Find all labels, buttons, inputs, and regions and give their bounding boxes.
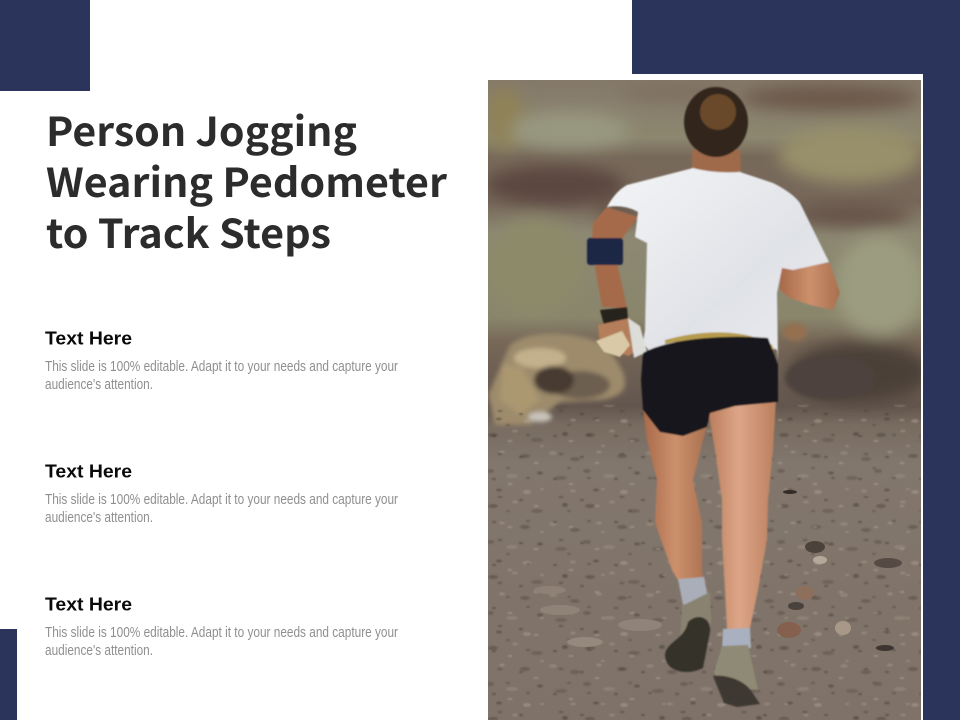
runner: hand with glove (596, 318, 647, 358)
runner (587, 87, 840, 707)
runner: waistband (665, 332, 774, 350)
text block 2: Text Here (45, 460, 132, 482)
text block 2 (45, 460, 398, 526)
text block 3 (45, 594, 398, 659)
title: Person Jogging (46, 100, 357, 158)
runner: white shirt (607, 168, 829, 360)
runner: left arm (592, 207, 638, 308)
runner: left sock (678, 577, 708, 605)
text block 3: audience's attention. (45, 642, 153, 659)
runner: left shoe (665, 592, 711, 672)
runner: right sock (722, 628, 751, 650)
title: Wearing Pedometer (46, 151, 448, 209)
runner: head and hair (684, 87, 748, 173)
text block 1 (45, 328, 398, 393)
text block 1: This slide is 100% editable. Adapt it to your needs and capture your (45, 358, 398, 375)
runner: right leg (708, 400, 776, 630)
title (46, 100, 448, 260)
photo background: rocks (488, 323, 875, 425)
runner: right arm (780, 263, 840, 310)
runner: right shoe (713, 645, 760, 707)
text block 3: This slide is 100% editable. Adapt it to your needs and capture your (45, 624, 398, 641)
frame block: top and right (632, 0, 960, 720)
pedometer armband (587, 238, 623, 265)
text block 1: audience's attention. (45, 376, 153, 393)
runner: black shorts (641, 337, 778, 436)
photo background: hillside and scrub (485, 80, 930, 720)
text block 2: audience's attention. (45, 509, 153, 526)
runner: wrist watch (600, 307, 628, 325)
title: to Track Steps (46, 202, 331, 260)
photo background: gravel ground (488, 405, 921, 720)
text block 1: Text Here (45, 328, 132, 348)
text block 3: Text Here (45, 594, 132, 614)
corner block: bottom left (0, 629, 17, 720)
runner: left leg (643, 410, 708, 582)
text block 2: This slide is 100% editable. Adapt it to your needs and capture your (45, 491, 398, 508)
photo: runner seen from behind on a gravel trail (485, 80, 930, 720)
corner block: top left (0, 0, 90, 91)
